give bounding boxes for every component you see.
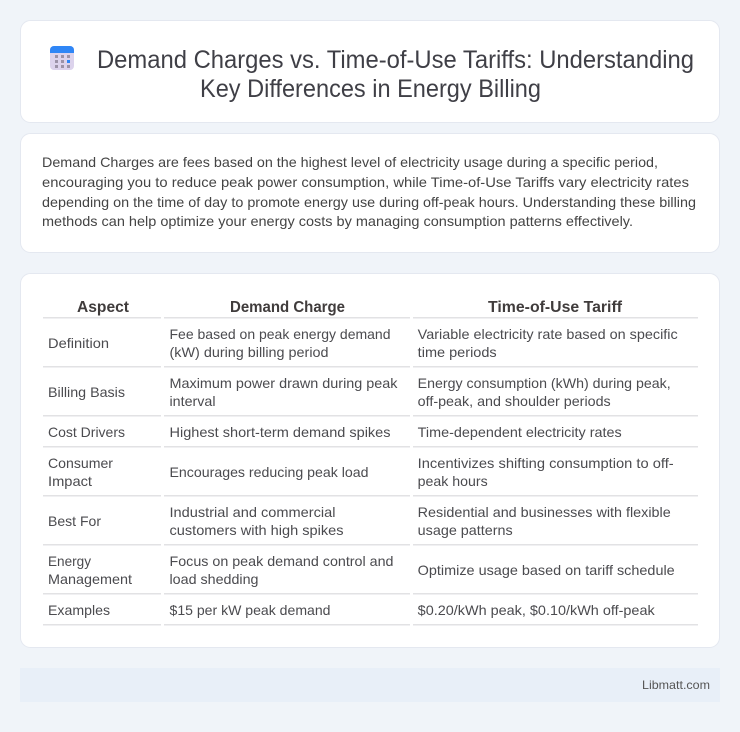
row: Billing Basis: Billing Basis xyxy=(48,384,125,400)
row: Consumer Impact: Encourages reducing peak load xyxy=(170,464,368,480)
text block: summary: depending on the time of day to promote energy use during off-peak hours. Understanding these billing xyxy=(42,194,696,210)
row: Energy Management: Energy xyxy=(48,553,91,569)
table header: Demand Charge xyxy=(230,299,345,316)
title: Demand Charges vs. Time-of-Use Tariffs: Understanding xyxy=(97,46,694,74)
row: Billing Basis xyxy=(48,375,671,409)
panel: summary paragraph xyxy=(20,134,720,252)
row: Definition: Fee based on peak energy demand xyxy=(170,326,390,342)
row: Energy Management: Optimize usage based on tariff schedule xyxy=(418,562,675,578)
row: Definition: time periods xyxy=(418,344,497,360)
row: Examples: $0.20/kWh peak, $0.10/kWh off-peak xyxy=(418,602,656,618)
text block: summary: Demand Charges are fees based on the highest level of electricity usage during a specific period, xyxy=(42,154,658,170)
row: Cost Drivers: Cost Drivers xyxy=(48,424,125,440)
row: Energy Management xyxy=(48,553,675,587)
row: Billing Basis: interval xyxy=(170,393,216,409)
row: Definition xyxy=(48,326,678,360)
row: Cost Drivers: Highest short-term demand spikes xyxy=(170,424,390,440)
row: Best For: Best For xyxy=(48,513,101,529)
row: Cost Drivers xyxy=(48,424,622,440)
panel: comparison table xyxy=(20,274,720,648)
row: Consumer Impact: peak hours xyxy=(418,473,488,489)
table header xyxy=(77,299,623,316)
row: Best For: usage patterns xyxy=(418,522,513,538)
text block: summary xyxy=(42,154,696,229)
footer bar xyxy=(20,668,720,702)
footer text: Libmatt.com xyxy=(642,678,710,692)
row: Best For: customers with high spikes xyxy=(170,522,344,538)
row: Examples: Examples xyxy=(48,602,110,618)
row: Examples xyxy=(48,602,656,618)
row: Consumer Impact: Incentivizes shifting consumption to off- xyxy=(418,455,674,471)
row: Billing Basis: Energy consumption (kWh) during peak, xyxy=(418,375,671,391)
row: Energy Management: Focus on peak demand control and xyxy=(170,553,394,569)
table header: Time-of-Use Tariff xyxy=(488,299,623,316)
row: Definition: (kW) during billing period xyxy=(170,344,328,360)
text block: summary: methods can help optimize your energy costs by managing consumption patterns effectively. xyxy=(42,213,633,229)
row: Definition: Definition xyxy=(48,335,109,351)
row: Consumer Impact xyxy=(48,455,674,489)
panel: title header xyxy=(20,20,720,122)
icon: calendar xyxy=(50,46,74,70)
row: Billing Basis: off-peak, and shoulder periods xyxy=(418,393,611,409)
row: Best For: Industrial and commercial xyxy=(170,504,336,520)
row: Cost Drivers: Time-dependent electricity rates xyxy=(418,424,622,440)
row: Energy Management: Management xyxy=(48,571,132,587)
row: Consumer Impact: Consumer xyxy=(48,455,113,471)
title: Key Differences in Energy Billing xyxy=(200,75,541,103)
table header: Aspect xyxy=(77,299,130,316)
row: Examples: $15 per kW peak demand xyxy=(170,602,330,618)
row: Billing Basis: Maximum power drawn during peak xyxy=(170,375,399,391)
row: Energy Management: load shedding xyxy=(170,571,258,587)
text block: summary: encouraging you to reduce peak power consumption, while Time-of-Use Tariffs vary electricity rates xyxy=(42,174,689,190)
row: Definition: Variable electricity rate based on specific xyxy=(418,326,678,342)
row: Consumer Impact: Impact xyxy=(48,473,92,489)
title xyxy=(97,46,694,103)
row: Best For: Residential and businesses with flexible xyxy=(418,504,671,520)
row: Best For xyxy=(48,504,671,538)
